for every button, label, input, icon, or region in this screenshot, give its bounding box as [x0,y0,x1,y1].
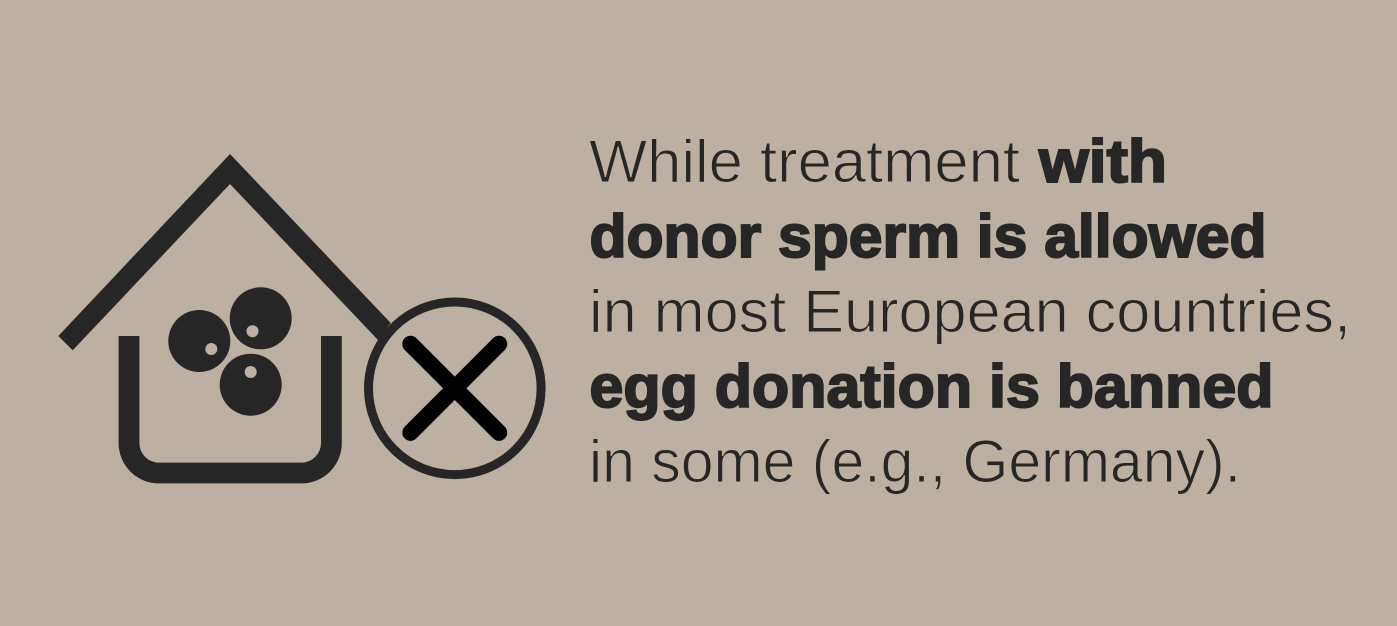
text line 1: with [1038,128,1167,195]
icon: house with three eggs and a prohibition mark [58,154,541,475]
icon: circled cross [368,302,541,475]
icon: house roof [58,154,391,350]
text block: donor treatment statement [589,127,1351,495]
icon: house body [129,336,331,473]
text line 4: egg donation is banned [590,353,1274,420]
egg cell bottom [220,354,282,416]
egg cell top right [230,287,292,349]
egg cell left [168,310,230,372]
icon: three egg cells [168,287,292,416]
text line 5: in some (e.g., Germany). [589,427,1241,495]
text line 2: donor sperm is allowed [590,203,1266,270]
text line 1: While treatment [589,127,1020,195]
text line 3: in most European countries, [589,277,1351,345]
